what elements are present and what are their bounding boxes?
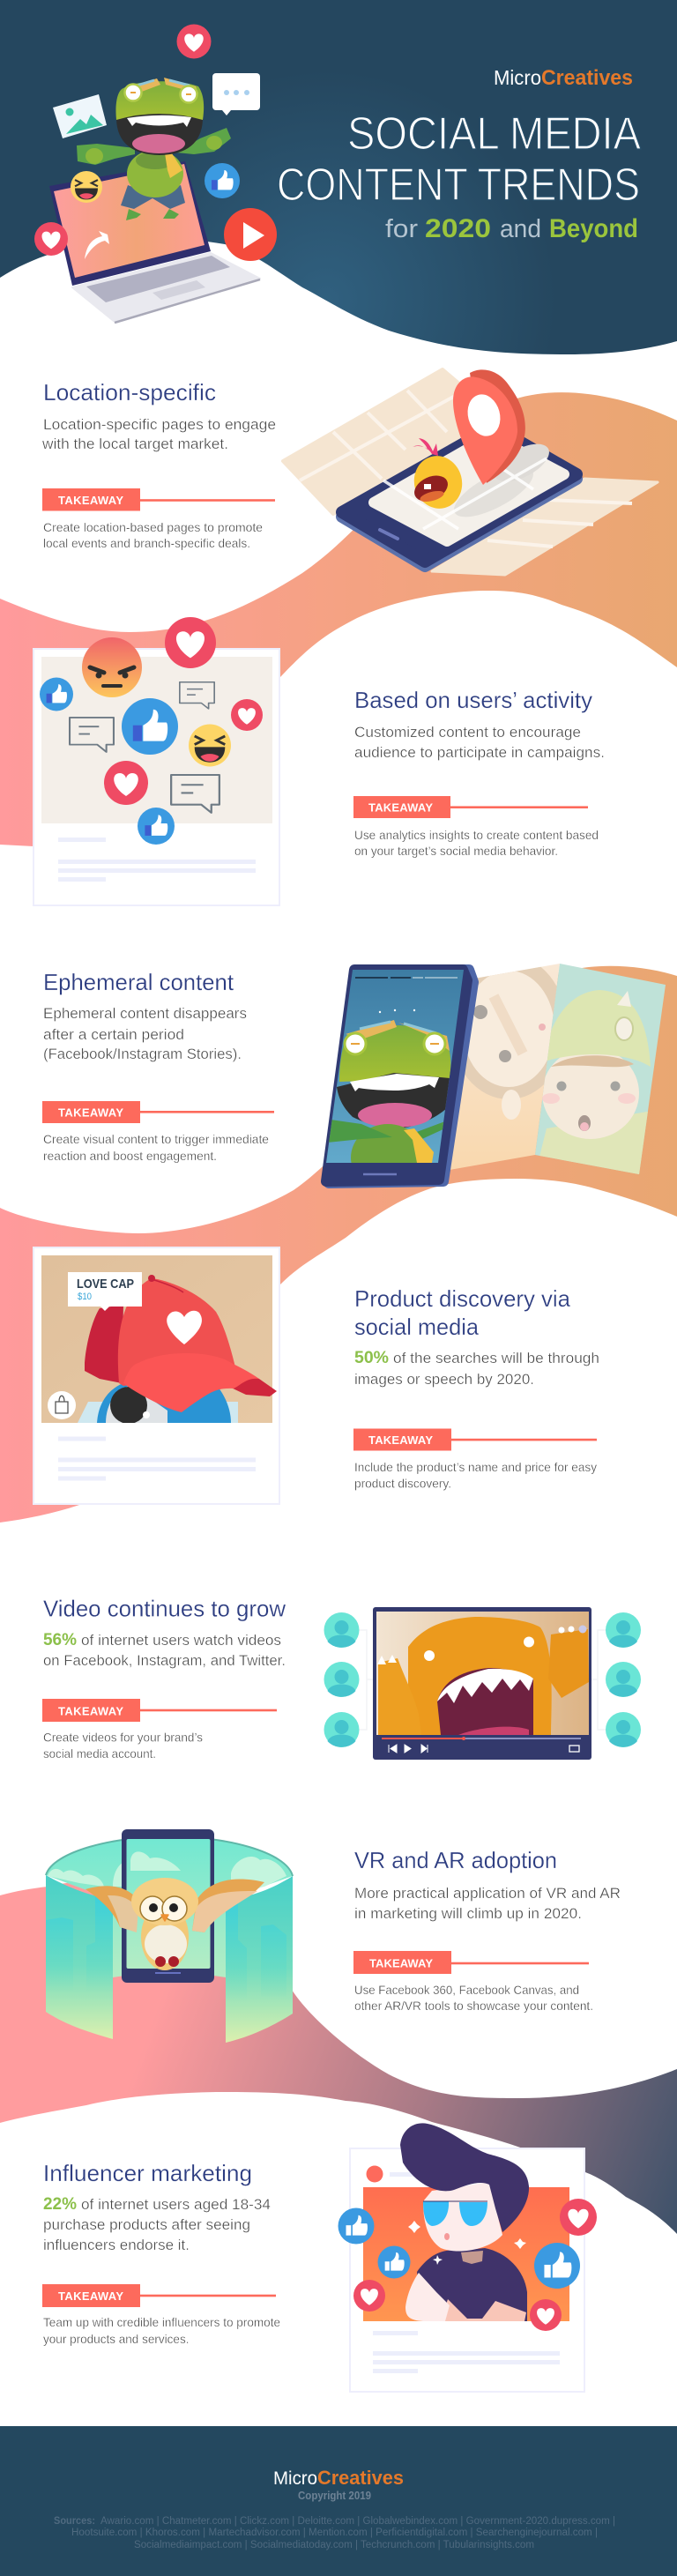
body text: (Facebook/Instagram Stories). — [43, 1046, 242, 1062]
icon: like small — [40, 677, 73, 711]
takeaway label — [42, 488, 275, 511]
takeaway label — [42, 1699, 277, 1722]
phone with frog story — [319, 970, 473, 1191]
heading: VR and AR adoption — [354, 1847, 557, 1873]
title — [277, 108, 641, 211]
takeaway text: on your target’s social media behavior. — [354, 844, 558, 858]
icon: chat bubble — [212, 73, 260, 115]
post text lines — [373, 2331, 560, 2373]
section: reactions post card — [33, 617, 279, 905]
chick character — [408, 438, 468, 514]
hero illustration: frog on laptop — [34, 25, 277, 323]
takeaway label — [353, 1951, 589, 1974]
price tag — [68, 1272, 142, 1311]
post avatar — [367, 2165, 420, 2183]
icon: comment bubble lower — [171, 775, 219, 813]
subtitle: 2020 — [425, 214, 491, 243]
icon: laughing emoji — [189, 725, 231, 767]
sources: Awario.com | Chatmeter.com | Clickz.com | Deloitte.com | Globalwebindex.com | Government-2020.dupress.com | — [100, 2516, 615, 2527]
panel: footer — [0, 2426, 677, 2576]
takeaway text: product discovery. — [354, 1476, 451, 1490]
laptop — [49, 161, 260, 323]
section: influencer marketing — [42, 2160, 280, 2346]
price tag: $10 — [78, 1292, 92, 1302]
footer logo: Micro — [273, 2468, 317, 2489]
background band 3 — [0, 1881, 677, 2234]
body text: of internet users watch videos — [81, 1632, 281, 1649]
takeaway text — [354, 828, 599, 858]
icon: like inner — [377, 2246, 411, 2278]
footer logo — [273, 2467, 404, 2489]
body text — [354, 1885, 621, 1922]
icon: laughing emoji — [71, 171, 102, 203]
illustration: stories on phone — [319, 955, 666, 1191]
body text: audience to participate in campaigns. — [354, 744, 605, 761]
takeaway label: TAKEAWAY — [58, 2289, 123, 2303]
illustration: VR cylinder and owl — [46, 1829, 293, 2043]
body text: Customized content to encourage — [354, 724, 581, 741]
takeaway text — [43, 1132, 269, 1163]
takeaway text: Create videos for your brand’s — [43, 1730, 203, 1744]
video player — [373, 1607, 591, 1760]
illustration: influencer post card — [338, 2123, 597, 2392]
section: product discovery — [353, 1285, 599, 1490]
takeaway text — [43, 1730, 203, 1761]
section: product post card — [33, 1247, 279, 1504]
heading — [354, 1285, 571, 1340]
post card — [33, 649, 279, 905]
body text: images or speech by 2020. — [354, 1371, 534, 1388]
body text — [354, 1349, 599, 1388]
takeaway label — [353, 796, 588, 818]
icon: heart right — [560, 2199, 597, 2236]
icon: shopping bag — [48, 1391, 76, 1419]
body text — [43, 1631, 286, 1669]
body text — [43, 1005, 247, 1062]
body text: on Facebook, Instagram, and Twitter. — [43, 1652, 286, 1669]
title: SOCIAL MEDIA — [347, 108, 641, 160]
icon: like left — [338, 2207, 374, 2245]
takeaway label: TAKEAWAY — [58, 1705, 123, 1717]
viewer avatars left — [324, 1612, 373, 1747]
footer logo: Creatives — [317, 2467, 404, 2489]
takeaway text: Create location-based pages to promote — [43, 520, 263, 534]
story card: child in dino hat — [535, 964, 666, 1177]
icon: heart lower left — [353, 2280, 385, 2312]
takeaway label: TAKEAWAY — [58, 1106, 123, 1120]
takeaway text: Team up with credible influencers to promote — [43, 2315, 280, 2329]
map tiles — [283, 369, 658, 575]
takeaway label: TAKEAWAY — [368, 1433, 433, 1447]
section: based on users' activity — [353, 687, 605, 858]
post image — [41, 657, 272, 823]
body text: More practical application of VR and AR — [354, 1885, 621, 1902]
icon: comment bubble top — [180, 682, 214, 709]
icon: heart lower right — [530, 2299, 562, 2331]
body text: in marketing will climb up in 2020. — [354, 1905, 582, 1922]
body text — [41, 416, 276, 452]
background band 1 — [0, 392, 677, 846]
icon: heart left — [34, 222, 68, 256]
body text: 50% — [354, 1349, 389, 1367]
body text — [354, 724, 605, 761]
post text lines — [58, 838, 256, 882]
takeaway text: your products and services. — [43, 2332, 189, 2346]
body text — [43, 2195, 271, 2253]
icon: play button — [224, 208, 277, 261]
body text: Ephemeral content disappears — [43, 1005, 247, 1022]
takeaway text: Use analytics insights to create content based — [354, 828, 599, 842]
logo: Micro — [494, 66, 541, 89]
body text: Location-specific pages to engage — [43, 416, 276, 433]
takeaway label: TAKEAWAY — [369, 1957, 433, 1969]
subtitle: Beyond — [549, 214, 638, 243]
subtitle: for — [385, 215, 418, 243]
background band 2 — [0, 966, 677, 1523]
post image — [363, 2187, 569, 2321]
takeaway text: Use Facebook 360, Facebook Canvas, and — [354, 1983, 579, 1997]
icon: heart top — [176, 25, 212, 58]
section: video continues to grow — [42, 1596, 286, 1761]
owl character — [86, 1878, 264, 1970]
cylinder back wall — [46, 1836, 293, 1977]
cylinder right panel — [226, 1876, 293, 2043]
panel: header navy wave — [0, 0, 677, 354]
viewer avatars right — [591, 1612, 641, 1747]
story card: monkey — [450, 964, 560, 1170]
location pin — [453, 369, 525, 485]
section: VR and AR adoption — [353, 1847, 621, 2013]
influencer character — [400, 2123, 529, 2321]
body text: purchase products after seeing — [43, 2216, 250, 2233]
illustration: phone map with pin — [283, 369, 658, 575]
takeaway text: social media account. — [43, 1746, 156, 1761]
takeaway text — [354, 1460, 597, 1490]
post text lines — [58, 1437, 256, 1481]
post image: cap — [41, 1255, 277, 1424]
copyright: Copyright 2019 — [298, 2489, 371, 2502]
VR phone — [122, 1829, 214, 1983]
body text: with the local target market. — [41, 436, 228, 452]
body text: 22% — [43, 2195, 77, 2214]
takeaway label: TAKEAWAY — [58, 494, 123, 507]
icon: like right — [534, 2243, 580, 2289]
takeaway label — [42, 1101, 274, 1123]
heading: Influencer marketing — [43, 2160, 252, 2186]
icon: heart lower — [104, 761, 148, 805]
phone — [342, 427, 577, 566]
takeaway text: Create visual content to trigger immediate — [43, 1132, 269, 1146]
cylinder left panel — [46, 1875, 113, 2039]
takeaway label — [353, 1428, 597, 1451]
body text: influencers endorse it. — [43, 2237, 190, 2253]
heading: Location-specific — [43, 379, 216, 406]
body text: of the searches will be through — [393, 1350, 599, 1366]
subtitle — [385, 214, 638, 243]
takeaway text — [43, 520, 263, 550]
monster character — [377, 1617, 589, 1735]
heading: Video continues to grow — [43, 1596, 286, 1622]
frog character — [77, 78, 231, 220]
section: ephemeral content — [42, 969, 274, 1163]
heading: Ephemeral content — [43, 969, 234, 995]
takeaway text: Include the product’s name and price for easy — [354, 1460, 597, 1474]
takeaway label: TAKEAWAY — [368, 800, 433, 815]
price tag: LOVE CAP — [77, 1277, 134, 1292]
post card — [350, 2148, 584, 2392]
takeaway text: other AR/VR tools to showcase your content. — [354, 1999, 593, 2013]
takeaway text — [354, 1983, 593, 2013]
body text: after a certain period — [43, 1026, 184, 1043]
sources: Hootsuite.com | Khoros.com | Martechadvisor.com | Mention.com | Perficientdigital.com | Searchenginejournal.com | — [71, 2528, 598, 2538]
takeaway text: local events and branch-specific deals. — [43, 536, 250, 550]
heading: Product discovery via — [354, 1285, 571, 1312]
icon: comment bubble left — [70, 718, 114, 752]
icon: photo — [53, 94, 107, 138]
icon: heart right — [231, 699, 263, 731]
heading: Based on users’ activity — [354, 687, 592, 713]
body text: 56% — [43, 1631, 77, 1649]
section: location-specific — [41, 379, 276, 550]
heading: social media — [354, 1314, 480, 1340]
logo: Creatives — [541, 66, 633, 90]
sources: Sources: — [54, 2516, 95, 2527]
icon: like — [205, 163, 240, 198]
icon: heart — [165, 617, 216, 668]
illustration: video player with viewers — [324, 1607, 641, 1760]
icon: like lower — [138, 808, 175, 845]
takeaway text — [43, 2315, 280, 2346]
sources — [54, 2516, 615, 2550]
player controls — [382, 1737, 581, 1753]
body text: of internet users aged 18-34 — [81, 2196, 271, 2213]
icon: angry emoji — [82, 637, 142, 697]
logo — [494, 66, 633, 90]
takeaway label — [42, 2284, 276, 2307]
subtitle: and — [500, 215, 541, 243]
sources: Socialmediaimpact.com | Socialmediatoday.com | Techcrunch.com | Tubularinsights.com — [134, 2540, 534, 2550]
post card — [33, 1247, 279, 1504]
icon: like big — [122, 698, 178, 755]
takeaway text: reaction and boost engagement. — [43, 1149, 217, 1163]
